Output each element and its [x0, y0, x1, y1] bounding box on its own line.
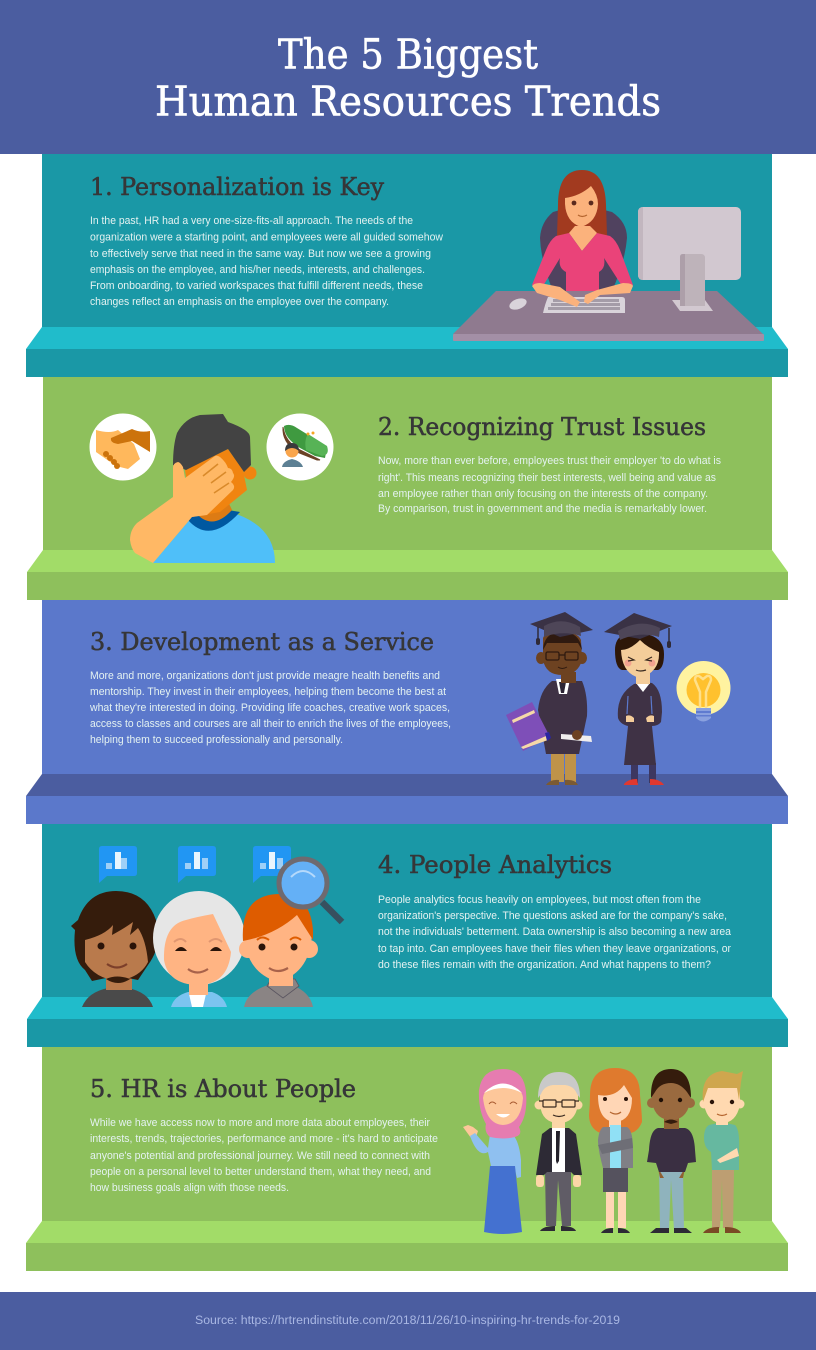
- text block 2: an employee rather than only focusing on the interests of the company.: [378, 488, 708, 500]
- header banner: [0, 0, 816, 154]
- text block 4: do these files remain with the organization. And what happens to them?: [378, 959, 711, 971]
- text block 1: From onboarding, to varied workspaces that fulfill different needs, these: [90, 280, 423, 292]
- text block 1: to effectively serve that need in the same way. But now we see a growing: [90, 248, 431, 260]
- text block 2: By comparison, trust in government and the media is remarkably lower.: [378, 503, 707, 515]
- illustration: male graduate: [506, 612, 593, 785]
- illustration: man facepalm: [130, 414, 275, 563]
- text block 3: More and more, organizations don't just provide meagre health benefits and: [90, 670, 440, 682]
- heading 2: 2. Recognizing Trust Issues: [378, 413, 706, 441]
- text block 3: what they're interested in doing. Providing life coaches, creative work spaces,: [89, 702, 450, 714]
- footer banner: [0, 1292, 816, 1350]
- text block 5: [90, 1117, 438, 1194]
- icon: handshake: [90, 414, 156, 480]
- icon: magnifying glass: [279, 859, 342, 922]
- icon: boot stepping on person: [266, 414, 334, 480]
- illustration: man with blond hair: [700, 1071, 744, 1233]
- panel: 3 development: [26, 600, 788, 824]
- text block 4: People analytics focus heavily on employees, but most often from the: [378, 894, 701, 906]
- text block 1: [90, 215, 444, 308]
- illustration: older man in suit: [534, 1072, 582, 1231]
- text block 2: [378, 455, 721, 515]
- text block 3: mentorship. They invest in their employees, helping them become the best at: [90, 686, 447, 698]
- icons: chart speech bubbles: [99, 846, 291, 883]
- text block 3: helping them to succeed professionally and personally.: [90, 734, 343, 746]
- text block 3: access to classes and courses are all their to enrich the lives of the employees,: [90, 718, 451, 730]
- text block 4: not the individuals' betterment. Data ownership is also becoming a new area: [378, 926, 732, 938]
- text block 3: [89, 670, 451, 746]
- text block 1: changes reflect an emphasis on the employee over the company.: [90, 296, 389, 308]
- text block 5: interests, trends, trajectories, performance and more - it's hard to anticipate: [90, 1133, 438, 1145]
- illustration: woman at desk: [453, 170, 764, 341]
- text block 4: [378, 894, 732, 971]
- illustration: woman with red hair: [589, 1068, 642, 1233]
- text block 5: people on a personal level to better understand them, what they need, and: [90, 1166, 431, 1178]
- text block 5: how business goals align with those needs.: [90, 1182, 289, 1194]
- text block 1: In the past, HR had a very one-size-fits-all approach. The needs of the: [90, 215, 413, 227]
- panel: 2 trust issues: [27, 377, 788, 600]
- icon: light bulb: [676, 661, 730, 722]
- heading 4: 4. People Analytics: [378, 851, 612, 879]
- text block 2: right'. This means recognizing their best interests, well being and value as: [378, 472, 716, 484]
- heading 5: 5. HR is About People: [90, 1075, 356, 1103]
- title: Human Resources Trends: [155, 78, 661, 126]
- heading 1: 1. Personalization is Key: [90, 173, 384, 201]
- panel: 4 people analytics: [27, 824, 788, 1047]
- heading 3: 3. Development as a Service: [90, 628, 434, 656]
- illustration: man in dark sweater: [647, 1069, 696, 1233]
- text block 5: anyone's potential and professional journey. We still need to connect with: [90, 1150, 430, 1162]
- title: [155, 30, 661, 126]
- panel: 1 personalization: [26, 154, 788, 377]
- illustration: female graduate: [604, 613, 672, 785]
- text block 1: organization were a starting point, and employees were all guided somehow: [90, 232, 444, 244]
- illustration: woman in hijab: [463, 1069, 526, 1234]
- text block 4: organization's perspective. The questions asked are for the company's sake,: [378, 910, 727, 922]
- illustration: three faces: [71, 891, 318, 1007]
- text block 4: to tap into. Can employees have their files when they leave organizations, or: [378, 943, 731, 955]
- text block 5: While we have access now to more and more data about employees, their: [90, 1117, 430, 1129]
- text block 1: emphasis on the employee, and his/her needs, interests, and challenges.: [90, 264, 425, 276]
- source text: Source: https://hrtrendinstitute.com/2018/11/26/10-inspiring-hr-trends-for-2019: [195, 1315, 620, 1327]
- title: The 5 Biggest: [278, 30, 538, 78]
- panel: 5 hr is about people: [26, 1047, 788, 1271]
- text block 2: Now, more than ever before, employees trust their employer 'to do what is: [378, 455, 721, 467]
